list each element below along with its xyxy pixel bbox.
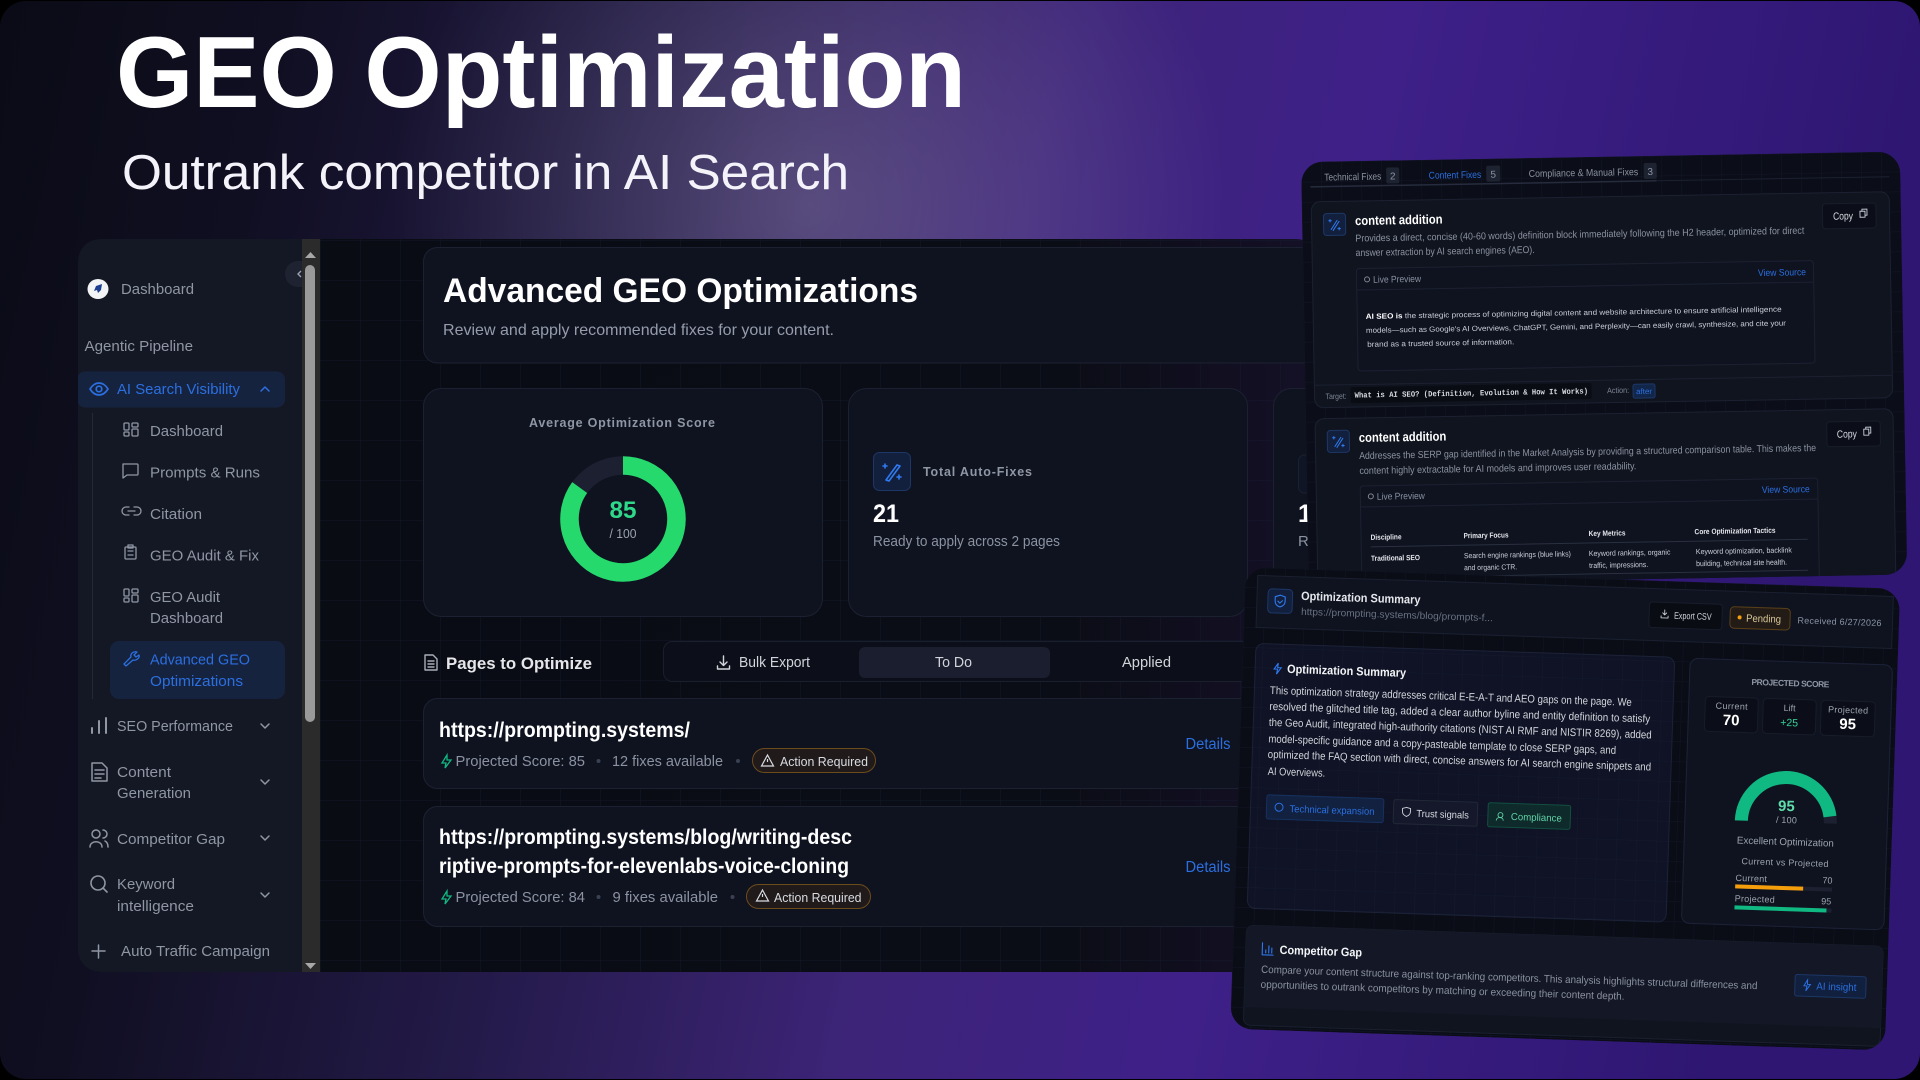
nav item: keyword intelligence: Keyword [117, 876, 175, 893]
fix card 1 [1311, 192, 1893, 408]
gauge: 95 of 100: 95 [1778, 798, 1795, 815]
nav item: citation [121, 506, 202, 519]
live preview table: View Source [1762, 484, 1810, 496]
summary card: Optimization Summary [1287, 662, 1407, 680]
copy button [1822, 203, 1876, 229]
tab bar [664, 642, 1284, 682]
summary card: AI Overviews. [1268, 766, 1325, 780]
tag: compliance [1488, 803, 1571, 829]
fix card 1: content addition [1355, 212, 1443, 228]
page row 2 [424, 806, 1294, 926]
tab bar: Bulk Export [739, 654, 811, 671]
tag: compliance: Compliance [1511, 812, 1562, 825]
footer: What is AI SEO? (Definition, Evolution & How It Works) [1355, 388, 1588, 401]
footer: after [1636, 387, 1652, 396]
copy button [1827, 421, 1881, 447]
page row 2: riptive-prompts-for-elevenlabs-voice-cloning [439, 855, 849, 878]
stat: current [1704, 696, 1758, 733]
header strip [1256, 575, 1893, 648]
nav item: advanced GEO optimizations (active): Optimizations [150, 673, 243, 690]
icon: magic wand [1329, 219, 1340, 231]
panel: optimization summary screenshot [1230, 567, 1900, 1050]
page row 2: https://prompting.systems/blog/writing-desc [439, 826, 852, 849]
competitor gap card [1243, 925, 1883, 1046]
nav item: GEO audit dashboard: Dashboard [150, 610, 223, 627]
nav item: keyword intelligence [91, 876, 269, 915]
live preview table: Traditional SEO [1371, 553, 1420, 563]
nav item: content generation: Generation [117, 785, 191, 802]
section heading: pages to optimize: Pages to Optimize [446, 654, 592, 673]
fix card 1: Provides a direct, concise (40-60 words) definition block immediately following the H2 header, optimized for direct [1355, 226, 1805, 245]
button: AI insight: AI insight [1816, 981, 1857, 994]
projected score card: Current vs Projected [1741, 856, 1829, 869]
logo [88, 279, 108, 299]
live preview table: Key Metrics [1588, 528, 1626, 538]
badge: action required: Action Required [774, 890, 862, 905]
nav item: dashboard: Dashboard [150, 423, 223, 440]
scrollbar [302, 239, 320, 972]
nav item: GEO audit and fix: GEO Audit & Fix [150, 548, 259, 564]
bar: current [1735, 872, 1833, 892]
collapse button [285, 261, 302, 287]
nav item: prompts and runs: Prompts & Runs [150, 464, 260, 482]
competitor gap card: opportunities to outrank competitors by matching or exceeding their content depth. [1260, 979, 1625, 1003]
badge: action required: Action Required [780, 754, 868, 769]
badge: action required [752, 748, 876, 772]
summary card: the Geo Audit, integrated high-authority citations (NIST AI RMF and NISTIR 8269), added [1269, 717, 1652, 742]
nav item: dashboard [123, 422, 222, 437]
nav item: AI search visibility (active): AI Search Visibility [117, 381, 240, 398]
card: average optimization score [424, 388, 822, 616]
icon: bolt [1274, 663, 1281, 674]
tabs: Content Fixes [1429, 170, 1481, 182]
bar: projected: Projected [1735, 893, 1775, 905]
tag: trust signals [1393, 800, 1478, 826]
header strip: https://prompting.systems/blog/prompts-f... [1301, 607, 1493, 624]
stat: current: Current [1715, 701, 1748, 712]
card: average optimization score: 85 [610, 497, 636, 524]
nav item: GEO audit dashboard [124, 589, 223, 627]
subtitle: Outrank competitor in AI Search [122, 146, 849, 200]
header strip: Optimization Summary [1301, 589, 1421, 607]
nav item: content generation: Content [117, 764, 172, 781]
nav item: competitor gap [90, 830, 269, 848]
title: GEO Optimization [116, 17, 966, 129]
stat: lift: +25 [1780, 717, 1798, 729]
projected score card [1681, 658, 1893, 930]
sidebar [77, 239, 320, 972]
page row 1: Projected Score: 85 [456, 753, 585, 770]
live preview box: View Source [1758, 267, 1806, 279]
header card: Review and apply recommended fixes for your content. [443, 322, 834, 339]
page row 1: 12 fixes available [612, 753, 723, 770]
live preview table: Search engine rankings (blue links) [1464, 549, 1571, 560]
nav item: SEO performance: SEO Performance [117, 718, 233, 735]
gauge: 95 of 100 [1741, 776, 1832, 827]
page row 1: https://prompting.systems/ [439, 719, 690, 742]
page row 2: Projected Score: 84 [456, 889, 585, 906]
live preview table: traffic, impressions. [1589, 560, 1648, 570]
projected score card: Excellent Optimization [1737, 835, 1834, 850]
tab bar: To Do [935, 654, 972, 671]
competitor gap card: Competitor Gap [1279, 943, 1362, 960]
button: export CSV: Export CSV [1674, 611, 1712, 623]
badge: pending [1730, 607, 1790, 630]
card: total auto-fixes: Ready to apply across 2 pages [873, 533, 1060, 550]
tabs: 5 [1490, 170, 1497, 181]
gauge: 95 of 100: / 100 [1776, 815, 1797, 825]
card: total auto-fixes: 21 [873, 500, 899, 528]
stat: lift: Lift [1783, 703, 1796, 713]
card: third metric (partly hidden) [1273, 388, 1308, 568]
panel: main dashboard screen [78, 239, 1309, 972]
live preview table: building, technical site health. [1696, 558, 1787, 568]
card: average optimization score: Average Optimization Score [529, 416, 715, 430]
summary card: resolved the glitched title tag, added a clear author byline and entity definition to satisfy [1269, 701, 1651, 726]
bar: projected: 95 [1821, 896, 1831, 907]
summary card: optimized the FAQ section with direct, concise answers for AI search engine snippets and [1268, 749, 1651, 774]
tabs: 3 [1647, 167, 1654, 178]
fix card 2: content addition [1359, 429, 1446, 445]
live preview table: Live Preview [1377, 491, 1425, 503]
projected score card: PROJECTED SCORE [1751, 677, 1830, 689]
nav item: competitor gap: Competitor Gap [117, 831, 225, 848]
button: AI insight [1795, 974, 1866, 998]
competitor gap card: Compare your content structure against top-ranking competitors. This analysis highlights structural differences and [1261, 964, 1758, 992]
stat: projected: Projected [1828, 704, 1868, 716]
badge: action required [746, 884, 870, 908]
page row 2: Details [1186, 859, 1231, 876]
page row 1 [424, 698, 1294, 788]
icon: shield [1275, 595, 1285, 607]
nav item: citation: Citation [150, 506, 202, 523]
tag: technical expansion: Technical expansion [1289, 804, 1375, 818]
live preview box: AI SEO is the strategic process of optimizing digital content and website architecture to ensure artificial intelligence [1366, 305, 1782, 321]
header card: Advanced GEO Optimizations [443, 272, 918, 310]
footer: Target: [1326, 392, 1347, 401]
nav item: SEO performance [92, 718, 269, 735]
header strip: Received 6/27/2026 [1797, 615, 1882, 628]
nav item: advanced GEO optimizations (active): Advanced GEO [150, 652, 250, 668]
footer [1315, 375, 1892, 404]
card: total auto-fixes [848, 388, 1248, 616]
tabs: Technical Fixes [1324, 172, 1381, 184]
icon: magic wand [883, 464, 901, 481]
card: total auto-fixes: Total Auto-Fixes [923, 465, 1032, 479]
live preview table [1360, 478, 1820, 580]
icon: magic wand [1333, 436, 1344, 447]
nav item: auto traffic campaign: Auto Traffic Campaign [121, 943, 270, 960]
nav item: GEO audit dashboard: GEO Audit [150, 589, 221, 606]
bar: current: 70 [1822, 875, 1833, 886]
card: third metric (partly hidden): 1 [1298, 500, 1312, 528]
summary card: This optimization strategy addresses critical E-E-A-T and AEO gaps on the page. We [1270, 685, 1632, 709]
bar: current: Current [1735, 873, 1768, 884]
stat: projected: 95 [1839, 716, 1856, 733]
nav item: keyword intelligence: intelligence [117, 898, 194, 915]
nav item: content generation [92, 763, 269, 802]
live preview box: brand as a trusted source of information. [1367, 337, 1514, 349]
fix card 2 [1315, 409, 1896, 599]
sidebar: Dashboard [121, 281, 194, 298]
fix card 1: answer extraction by AI search engines (AEO). [1356, 245, 1535, 259]
icon: bar chart [1262, 943, 1274, 955]
live preview box: models—such as Google's AI Overviews, ChatGPT, Gemini, and Perplexity—can easily crawl, synthesize, and cite your [1366, 319, 1786, 335]
live preview box [1356, 261, 1815, 371]
fix card 2: Addresses the SERP gap identified in the Market Analysis by providing a structured comparison table. This makes the [1359, 443, 1817, 462]
live preview box: Live Preview [1373, 274, 1421, 286]
live preview table: Primary Focus [1463, 530, 1509, 540]
tab bar: Applied [1122, 654, 1171, 671]
summary card [1247, 643, 1675, 922]
stat: projected [1820, 700, 1875, 737]
nav item: advanced GEO optimizations (active) [110, 641, 285, 699]
card: third metric (partly hidden): R [1298, 533, 1309, 550]
nav item: AI search visibility (active) [77, 372, 285, 408]
sidebar: Agentic Pipeline [84, 338, 193, 355]
copy button: Copy [1837, 428, 1858, 441]
tabs: Compliance & Manual Fixes [1529, 167, 1638, 180]
live preview table: Keyword optimization, backlink [1696, 545, 1792, 556]
live preview table: and organic CTR. [1464, 562, 1517, 572]
card: average optimization score: / 100 [610, 526, 636, 541]
tag: trust signals: Trust signals [1416, 809, 1469, 822]
stat: lift [1762, 698, 1816, 735]
live preview table: Keyword rankings, organic [1589, 548, 1671, 558]
nav item: GEO audit and fix [124, 544, 259, 560]
tabs [1310, 163, 1890, 188]
copy button: Copy [1833, 210, 1854, 223]
summary card: model-specific guidance and a copy-pasteable template to close SERP gaps, and [1268, 733, 1616, 757]
bar: projected [1734, 893, 1832, 913]
tabs: 2 [1390, 171, 1396, 182]
button: export CSV [1649, 602, 1723, 630]
fix card 2: content highly extractable for AI models and improves user readability. [1359, 461, 1636, 477]
stat: current: 70 [1723, 712, 1740, 729]
page row 1: Details [1186, 736, 1231, 753]
badge: pending: Pending [1746, 613, 1781, 626]
page row 2: 9 fixes available [612, 889, 718, 906]
footer: Action: [1607, 386, 1629, 395]
tag: technical expansion [1266, 795, 1384, 823]
header card [424, 248, 1324, 363]
live preview table: Core Optimization Tactics [1694, 526, 1776, 536]
panel: content fixes screenshot [1301, 152, 1908, 599]
live preview table: Discipline [1370, 532, 1402, 542]
